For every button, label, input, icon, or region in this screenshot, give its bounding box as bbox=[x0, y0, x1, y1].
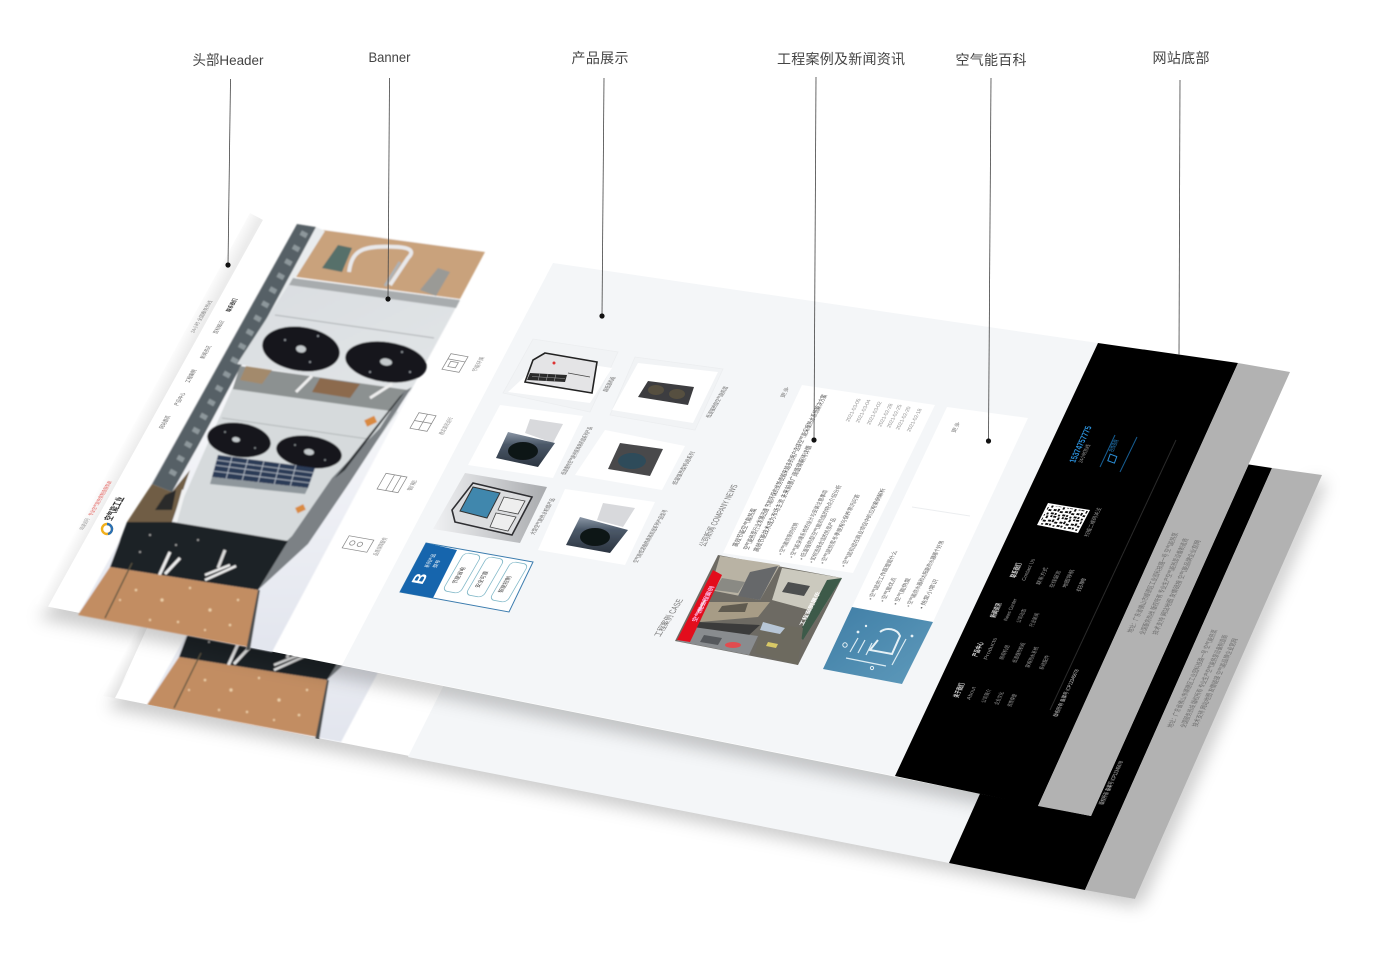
callout: encyclopedia: 空气能百科 bbox=[956, 52, 1026, 68]
footer column: product: Products bbox=[983, 637, 999, 660]
footer column: about: 公司简介 bbox=[979, 688, 993, 703]
footer column: about: 企业文化 bbox=[992, 691, 1006, 705]
footer column: contact: 联系我们 bbox=[1008, 562, 1024, 578]
encyclopedia list: • 空气能热泵 bbox=[891, 577, 913, 605]
hotline caption: 24小时热线 bbox=[1076, 443, 1093, 463]
product labels: 低温强热型空气能机组 bbox=[704, 386, 730, 418]
news list: • 空气能热泵冬季使用与保养常识问答 bbox=[818, 494, 862, 564]
encyclopedia more link: 更多 bbox=[949, 421, 963, 433]
encyclopedia list: • 空气能的工作原理是什么 bbox=[866, 550, 899, 600]
panel: cases and news bbox=[651, 385, 935, 665]
series banner bbox=[400, 543, 533, 612]
footer column: contact: 地图导航 bbox=[1060, 568, 1077, 588]
navigation: 百科知识 bbox=[211, 320, 226, 334]
product card 5 bbox=[433, 473, 547, 543]
encyclopedia list: • 空气能热水器和太阳能热水器哪个好用 bbox=[904, 540, 946, 607]
tagline: 欢迎访问 bbox=[77, 518, 91, 530]
case photo collage: 空气能工程案例 bbox=[690, 585, 716, 622]
hotline number: 15374757775 bbox=[1067, 425, 1094, 463]
footer column: product: 商用机组 bbox=[997, 644, 1012, 660]
navigation: 联系我们 bbox=[224, 298, 239, 312]
callout: banner: Banner bbox=[368, 49, 411, 65]
back page footer note bbox=[1165, 629, 1240, 728]
callout: header: 头部Header bbox=[192, 52, 264, 68]
icon: feature two bbox=[410, 413, 436, 431]
case photo collage: 工程案例展示 bbox=[797, 591, 823, 626]
footer column: product: 家用热水系统 bbox=[1023, 646, 1041, 668]
feature labels: 智能 bbox=[405, 479, 419, 491]
panel: air energy encyclopedia bbox=[823, 407, 1028, 684]
back page shadow bbox=[108, 480, 1327, 908]
callout: products: 产品展示 bbox=[572, 50, 628, 66]
heading: news: 公司新闻 COMPANY NEWS bbox=[696, 484, 740, 547]
consult button: 在线咨询 bbox=[1107, 439, 1120, 452]
footer column: news: 行业新闻 bbox=[1027, 612, 1041, 627]
news dates: 2021-03-02 bbox=[866, 401, 884, 425]
header bbox=[77, 298, 239, 534]
QR code bbox=[1037, 503, 1090, 533]
back page footer note: 全国服务热线 版权所有 专业生产空气能热泵设备制造商 bbox=[1178, 634, 1230, 728]
news list: 空气能热泵行业发展迅速 节能环保的优势使越来越多的用户选择空气能采暖热水系统解决方案 bbox=[741, 394, 829, 550]
footer note: 地址：广东省佛山市顺德区工业园科技路一号 空气能热泵 bbox=[1125, 532, 1180, 633]
copyright: 版权所有 备案号 ICP12345678 bbox=[1051, 669, 1081, 717]
news list: • 空气能机组在商业项目中的应用案例解析 bbox=[839, 488, 887, 567]
footer column: product bbox=[970, 637, 1052, 670]
product card 3 bbox=[468, 405, 583, 478]
feature labels: 品质保障服务 bbox=[371, 537, 389, 556]
news card bbox=[723, 385, 935, 573]
icon: feature four bbox=[342, 536, 374, 552]
callout: footer: 网站底部 bbox=[1152, 50, 1210, 66]
footer column: contact: 在线留言 bbox=[1047, 569, 1063, 588]
news list: • 空气能热泵的优势 bbox=[776, 522, 801, 555]
callout: cases and news bbox=[777, 51, 905, 443]
news dates: 2021-03-04 bbox=[855, 399, 873, 423]
footer column: news: News Center bbox=[1003, 598, 1019, 621]
series banner: 型号 bbox=[431, 559, 442, 568]
logo ring bbox=[102, 524, 112, 534]
case photo collage bbox=[675, 555, 842, 665]
news dates: 2021-03-05 bbox=[845, 398, 863, 422]
footer column: product: 产品中心 bbox=[970, 641, 986, 657]
back page layer bbox=[106, 464, 1330, 912]
news dates: 2021-02-18 bbox=[906, 408, 924, 432]
footer column: contact: Contact Us bbox=[1021, 558, 1037, 581]
panel: product showcase bbox=[400, 339, 730, 612]
back page footer black bbox=[949, 447, 1272, 890]
footer note bbox=[1125, 532, 1203, 635]
callout: header bbox=[192, 52, 264, 268]
news list: 高效节能技术成为市场主流 未来前景广阔值得期待详情 bbox=[751, 445, 814, 552]
panel: footer contents bbox=[951, 425, 1203, 717]
series banner: 安全可靠 bbox=[473, 570, 490, 588]
product card 6 bbox=[538, 489, 655, 565]
product card 1 bbox=[503, 339, 618, 412]
product labels: 大型空气能热水机组产品 bbox=[528, 498, 557, 535]
feature labels: 节能环保 bbox=[470, 356, 486, 372]
heading: cases: 工程案例 CASE bbox=[651, 598, 685, 637]
series banner: B bbox=[407, 572, 432, 586]
news dates bbox=[845, 398, 924, 432]
footer column: about: 关于我们 bbox=[951, 682, 967, 698]
QR caption: 扫描二维码关注 bbox=[1082, 507, 1104, 537]
product card 2 bbox=[610, 357, 723, 430]
footer black bbox=[895, 343, 1238, 806]
product labels: 低温强热空气能热泵商用机组系列产品 bbox=[559, 426, 594, 475]
footer column: product: 系统配件 bbox=[1037, 654, 1052, 670]
news list: • 如何选择合适的热泵产品 bbox=[807, 518, 838, 563]
front page shadow bbox=[38, 590, 1095, 828]
footer column: about: About bbox=[966, 686, 978, 700]
news dates: 2021-02-20 bbox=[895, 406, 913, 430]
logo text: 空气能工业 bbox=[101, 496, 127, 522]
news list: • 低温强热型空气能机组的特点介绍分析 bbox=[797, 484, 844, 560]
feature labels: 稳定高效运行 bbox=[437, 417, 455, 435]
front page left fade bbox=[35, 213, 263, 607]
footer column: news bbox=[988, 598, 1041, 627]
icon: feature three bbox=[377, 473, 407, 493]
navigation: 产品中心 bbox=[172, 392, 187, 406]
news more link: 更多 bbox=[778, 386, 792, 398]
footer column: contact bbox=[1008, 558, 1089, 592]
encyclopedia list: • 空气能优点 bbox=[878, 577, 898, 602]
navigation: 新闻资讯 bbox=[198, 345, 213, 359]
callout: banner bbox=[368, 49, 411, 302]
footer column: contact: 招聘 bbox=[1074, 577, 1089, 592]
footer grey bbox=[1038, 363, 1290, 816]
banner photo bbox=[78, 224, 485, 652]
product labels: 超低温机组 bbox=[601, 376, 617, 392]
encyclopedia list bbox=[866, 540, 946, 609]
back page base bbox=[115, 330, 1322, 899]
back page content background bbox=[408, 372, 1135, 863]
footer column: about: 资质荣誉 bbox=[1005, 693, 1019, 707]
tagline red: 专业空气能热泵制造服务商 bbox=[86, 480, 114, 516]
back page footer grey bbox=[1085, 468, 1322, 899]
back page left fade bbox=[103, 626, 148, 698]
encyclopedia divider bbox=[912, 507, 970, 516]
news dates: 2021-02-25 bbox=[886, 404, 904, 428]
callout: products bbox=[572, 50, 628, 319]
navigation bbox=[157, 298, 239, 429]
footer column: contact: 联系方式 bbox=[1034, 566, 1050, 585]
encyclopedia list: • 热泵小常识 bbox=[917, 579, 940, 609]
front page base bbox=[48, 220, 1290, 816]
back page banner photo bbox=[146, 635, 378, 742]
product labels bbox=[528, 376, 730, 563]
navigation: 工程案例 bbox=[183, 369, 198, 383]
footer column: product: 低温强热机组 bbox=[1010, 642, 1027, 663]
news dates: 2021-02-28 bbox=[877, 403, 895, 427]
encyclopedia card bbox=[852, 407, 1028, 622]
icon: feature one bbox=[442, 354, 468, 372]
product card 4 bbox=[575, 430, 685, 490]
footer note: 全国服务热线 版权所有 专业生产空气能热泵设备制造商 bbox=[1137, 538, 1190, 635]
footer note: 技术支持 网站地图 友情链接 空气能品牌企业官网 bbox=[1150, 539, 1203, 635]
top contact: 24小时 全国服务热线 bbox=[188, 300, 215, 333]
navigation: 网站首页 bbox=[157, 415, 172, 429]
series banner: 系列产品 bbox=[422, 553, 438, 568]
series banner: 智能控制 bbox=[496, 575, 513, 593]
front page layer bbox=[35, 213, 1290, 828]
footer rule bbox=[1050, 440, 1176, 710]
back page footer note: 技术支持 网站地图 友情链接 空气能品牌企业官网 bbox=[1190, 638, 1240, 727]
back page copyright: 版权所有 备案号 ICP12345678 bbox=[1097, 760, 1125, 805]
encyclopedia image bbox=[823, 607, 933, 684]
news list: 高效节能空气能热泵 bbox=[730, 508, 759, 547]
news list: • 空气能采暖系统的设计与安装注意事项 bbox=[787, 489, 830, 558]
footer column: about bbox=[951, 682, 1019, 707]
back page footer note: 地址：广东省佛山市顺德区工业园科技路一号 空气能热泵 bbox=[1165, 629, 1219, 728]
series banner: 节能省电 bbox=[450, 566, 467, 584]
callout: encyclopedia bbox=[956, 52, 1026, 444]
feature icons bbox=[342, 354, 468, 552]
consult button bbox=[1100, 435, 1137, 472]
footer column: news: 公司动态 bbox=[1014, 608, 1028, 623]
content background bbox=[342, 263, 1098, 776]
callout: cases and news: 工程案例及新闻资讯 bbox=[777, 51, 905, 67]
footer column: news: 新闻资讯 bbox=[988, 602, 1004, 618]
news list bbox=[730, 394, 887, 567]
feature labels bbox=[371, 356, 486, 556]
product labels: 低温强热型机组系列 bbox=[670, 451, 697, 485]
product labels: 空气能低温强热商用机组系列产品型号 bbox=[631, 509, 669, 563]
